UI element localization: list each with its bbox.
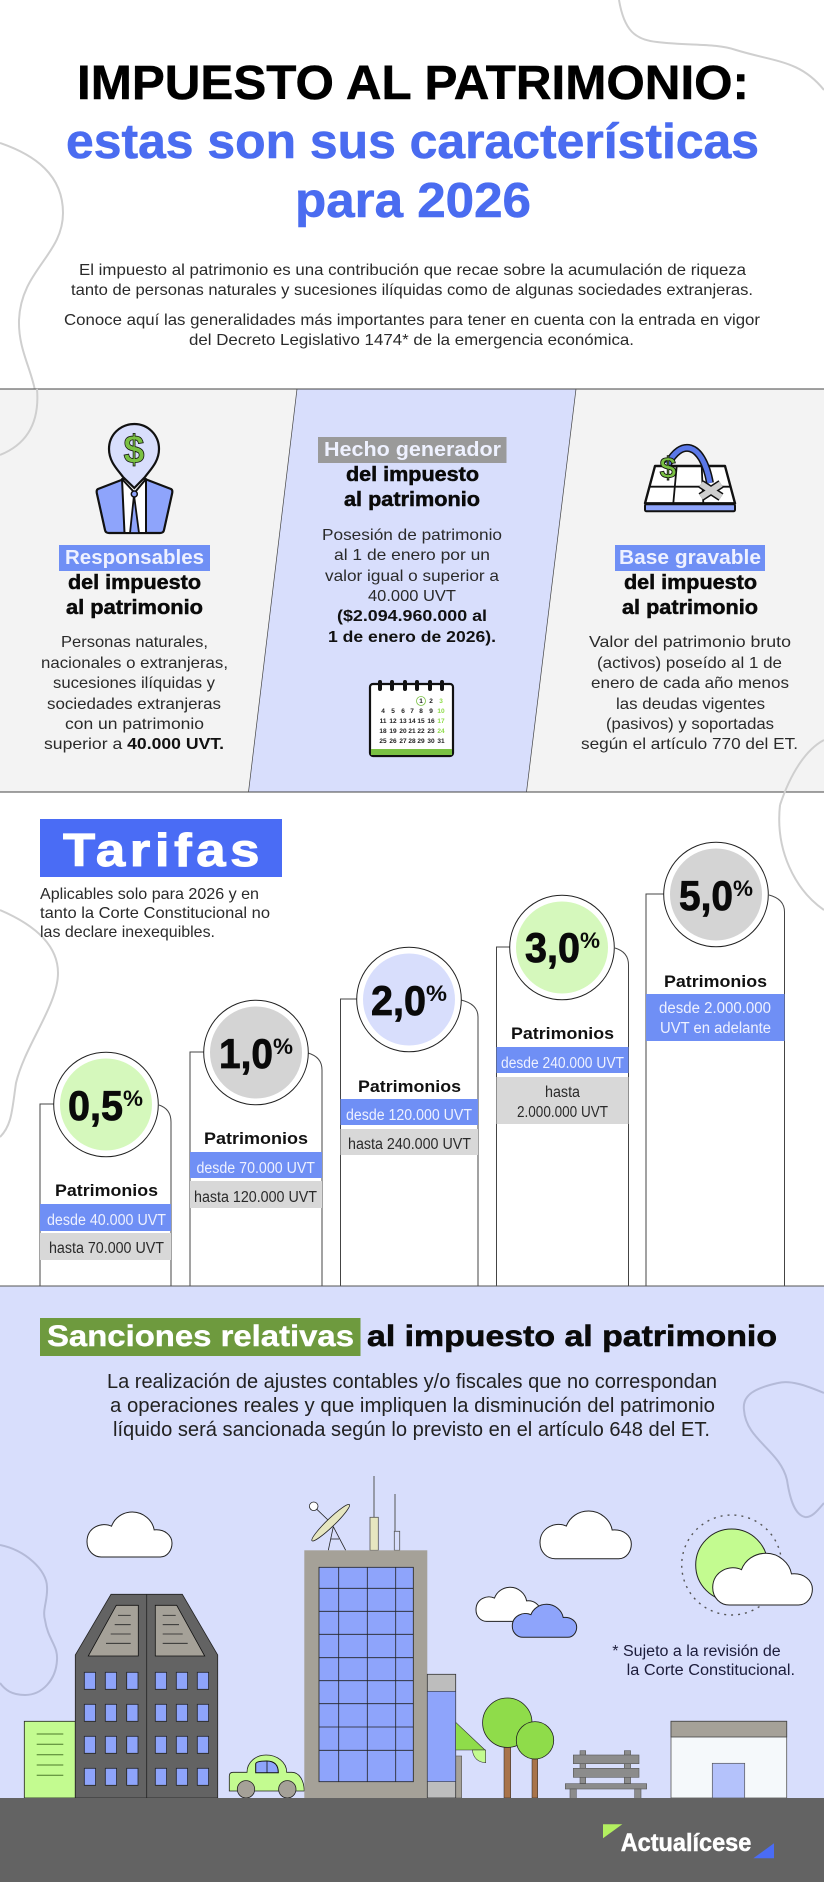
heading: responsables: del impuesto [68, 572, 201, 594]
icon: calendar: 9 [429, 708, 433, 715]
icon: calendar: 29 [417, 738, 425, 745]
text: base gravable: Valor del patrimonio bruto [589, 634, 791, 651]
text: base gravable: (activos) poseído al 1 de [597, 655, 782, 672]
column: tarifa 2,0%: Patrimonios [358, 1077, 461, 1096]
text: base gravable: las deudas vigentes [616, 696, 765, 713]
intro text: El impuesto al patrimonio es una contribución que recae sobre la acumulación de riqueza [79, 262, 746, 279]
column: tarifa 3,0%: 3,0 [525, 924, 580, 971]
icon: sun with cloud [682, 1515, 812, 1615]
heading: sanciones [40, 1318, 777, 1356]
icon: car [229, 1755, 304, 1798]
icon: tax base table: $ [660, 452, 677, 485]
column: tarifa 5,0%: % [733, 876, 753, 901]
column: tarifa 3,0%: Patrimonios [511, 1024, 614, 1043]
icon: calendar: 24 [437, 728, 445, 735]
column: tarifa 0,5%: hasta 70.000 UVT [49, 1240, 164, 1257]
heading: sanciones: Sanciones relativas [47, 1320, 354, 1353]
building: glass tower with antennas [304, 1476, 427, 1798]
text: base gravable: según el artículo 770 del ET. [581, 736, 798, 753]
heading: responsables: Responsables [65, 547, 204, 569]
text: responsables: con un patrimonio [65, 716, 204, 733]
icon: calendar: 7 [410, 708, 414, 715]
icon: calendar [370, 682, 453, 756]
intro text [64, 262, 761, 349]
column: tarifa 0,5%: desde 40.000 UVT [47, 1212, 166, 1229]
icon: calendar: 17 [437, 718, 445, 725]
column: tarifa 1,0%: Patrimonios [204, 1129, 308, 1148]
icon: calendar: 16 [427, 718, 435, 725]
icon: calendar: 25 [379, 738, 387, 745]
icon: person with dollar [97, 424, 172, 533]
column: tarifa 2,0%: 2,0 [371, 977, 426, 1024]
column: tarifa 1,0%: % [273, 1034, 293, 1059]
heading: base gravable: Base gravable [619, 547, 761, 569]
icon: calendar: 10 [437, 708, 445, 715]
text: hecho generador: Posesión de patrimonio [322, 527, 502, 544]
icon: calendar: 11 [380, 718, 387, 725]
column: tarifa 3,0%: 2.000.000 UVT [517, 1104, 608, 1121]
column: tarifa 0,5%: % [123, 1086, 143, 1111]
icon: calendar: 1 [419, 698, 423, 705]
column: tarifa 0,5%: 0,5 [68, 1082, 123, 1129]
footnote [612, 1643, 795, 1679]
column: tarifa 1,0%: 1,0 [219, 1030, 273, 1077]
heading: base gravable [615, 545, 765, 619]
clouds: white and blue [476, 1587, 577, 1637]
bench [565, 1751, 647, 1798]
column: tarifa 2,0%: % [426, 981, 447, 1006]
cloud [540, 1511, 631, 1559]
icon: calendar: 8 [419, 708, 423, 715]
icon: calendar: 26 [389, 738, 397, 745]
column: tarifa 2,0%: desde 120.000 UVT [346, 1107, 472, 1124]
icon: calendar: 4 [381, 708, 385, 715]
heading: hecho generador: al patrimonio [344, 489, 480, 511]
column: tarifa 3,0%: hasta [545, 1084, 580, 1101]
text: responsables: sucesiones ilíquidas y [53, 675, 215, 692]
icon: tax base table [645, 448, 735, 511]
icon: calendar: 22 [417, 728, 425, 735]
icon: calendar: 28 [408, 738, 416, 745]
intro text: del Decreto Legislativo 1474* de la emergencia económica. [189, 332, 634, 349]
text: hecho generador: al 1 de enero por un [334, 547, 490, 564]
text: tarifas note: las declare inexequibles. [40, 924, 215, 941]
logo: Actualícese: Actualícese [621, 1829, 751, 1857]
footer bar [0, 1798, 824, 1882]
footnote: * Sujeto a la revisión de [612, 1643, 781, 1660]
column: tarifa 2,0%: hasta 240.000 UVT [348, 1136, 471, 1153]
icon: calendar: 18 [379, 728, 387, 735]
column: tarifa 2,0% [340, 947, 478, 1286]
icon: calendar: 15 [417, 718, 425, 725]
intro text: tanto de personas naturales y sucesiones ilíquidas como de algunas sociedades extranjeras. [71, 282, 753, 299]
column: tarifa 1,0%: hasta 120.000 UVT [194, 1189, 317, 1206]
text: base gravable [581, 634, 798, 753]
text: sanciones [107, 1371, 717, 1441]
intro text: Conoce aquí las generalidades más importantes para tener en cuenta con la entrada en vigor [64, 312, 761, 329]
icon: calendar: 3 [439, 698, 443, 705]
icon: calendar: 14 [408, 718, 416, 725]
text: base gravable: enero de cada año menos [591, 675, 789, 692]
column: tarifa 5,0%: 5,0 [679, 872, 733, 919]
column: tarifa 3,0%: % [580, 928, 600, 953]
building: white house [671, 1721, 787, 1798]
column: tarifa 0,5%: Patrimonios [55, 1181, 158, 1200]
column: tarifa 5,0%: Patrimonios [664, 972, 767, 991]
icon: person with dollar: $ [124, 428, 144, 472]
cloud [87, 1512, 172, 1557]
icon: calendar: 5 [391, 708, 395, 715]
icon: calendar: 13 [399, 718, 407, 725]
footnote: la Corte Constitucional. [627, 1662, 795, 1679]
title [66, 57, 759, 228]
icon: calendar: 6 [401, 708, 405, 715]
icon: calendar: 23 [427, 728, 435, 735]
title: para 2026 [295, 174, 531, 228]
text: base gravable: (pasivos) y soportadas [606, 716, 774, 733]
panel: sanciones [0, 1286, 824, 1798]
text: tarifas note [40, 886, 270, 941]
heading: sanciones: al impuesto al patrimonio [367, 1320, 777, 1353]
text: responsables [41, 634, 228, 753]
icon: calendar: 21 [408, 728, 416, 735]
building: green [24, 1721, 75, 1798]
text: responsables: sociedades extranjeras [47, 696, 221, 713]
text: responsables: nacionales o extranjeras, [41, 655, 228, 672]
icon: calendar: 20 [399, 728, 407, 735]
icon: calendar: 27 [399, 738, 407, 745]
heading: tarifas: Tarifas [63, 824, 264, 876]
panel: characteristics [0, 389, 824, 805]
heading: base gravable: del impuesto [624, 572, 757, 594]
icon: calendar: 2 [429, 698, 433, 705]
heading: hecho generador: Hecho generador [324, 439, 501, 461]
icon: calendar: 19 [389, 728, 397, 735]
text: hecho generador: 1 de enero de 2026). [328, 629, 496, 646]
column: tarifa 1,0%: desde 70.000 UVT [196, 1160, 315, 1177]
column: tarifa 0,5% [40, 1052, 171, 1286]
heading: hecho generador [318, 437, 506, 511]
column: tarifa 1,0% [190, 1000, 322, 1286]
building: dark tower [75, 1594, 218, 1798]
column: tarifa 3,0% [496, 895, 628, 1286]
icon: calendar: 12 [389, 718, 397, 725]
logo: Actualícese [603, 1824, 774, 1858]
icon: calendar: 30 [427, 738, 435, 745]
title: estas son sus características [66, 115, 759, 169]
column: tarifa 5,0% [646, 842, 784, 1286]
building: side annex with awning [427, 1674, 486, 1798]
text: hecho generador: ($2.094.960.000 al [337, 608, 487, 625]
column: tarifa 5,0%: UVT en adelante [660, 1020, 771, 1037]
heading: responsables [59, 545, 210, 619]
text: sanciones: La realización de ajustes contables y/o fiscales que no correspondan [107, 1371, 717, 1393]
text: hecho generador: valor igual o superior a [325, 568, 499, 585]
text: sanciones: a operaciones reales y que impliquen la disminución del patrimonio [110, 1395, 715, 1417]
heading: responsables: al patrimonio [66, 597, 203, 619]
column: tarifa 5,0%: desde 2.000.000 [659, 1000, 771, 1017]
text: hecho generador: 40.000 UVT [368, 588, 456, 605]
heading: base gravable: al patrimonio [622, 597, 758, 619]
text: responsables: superior a 40.000 UVT. [44, 736, 224, 753]
text: responsables: Personas naturales, [61, 634, 208, 651]
icon: calendar: 31 [437, 738, 445, 745]
column: tarifa 3,0%: desde 240.000 UVT [501, 1055, 624, 1072]
trees [483, 1698, 554, 1798]
text: sanciones: líquido será sancionada según lo previsto en el artículo 648 del ET. [113, 1419, 710, 1441]
text: tarifas note: Aplicables solo para 2026 y en [40, 886, 259, 903]
text: hecho generador [322, 527, 502, 646]
title: IMPUESTO AL PATRIMONIO: [77, 57, 749, 110]
text: tarifas note: tanto la Corte Constitucional no [40, 905, 270, 922]
heading: tarifas [40, 819, 282, 877]
heading: hecho generador: del impuesto [346, 464, 479, 486]
